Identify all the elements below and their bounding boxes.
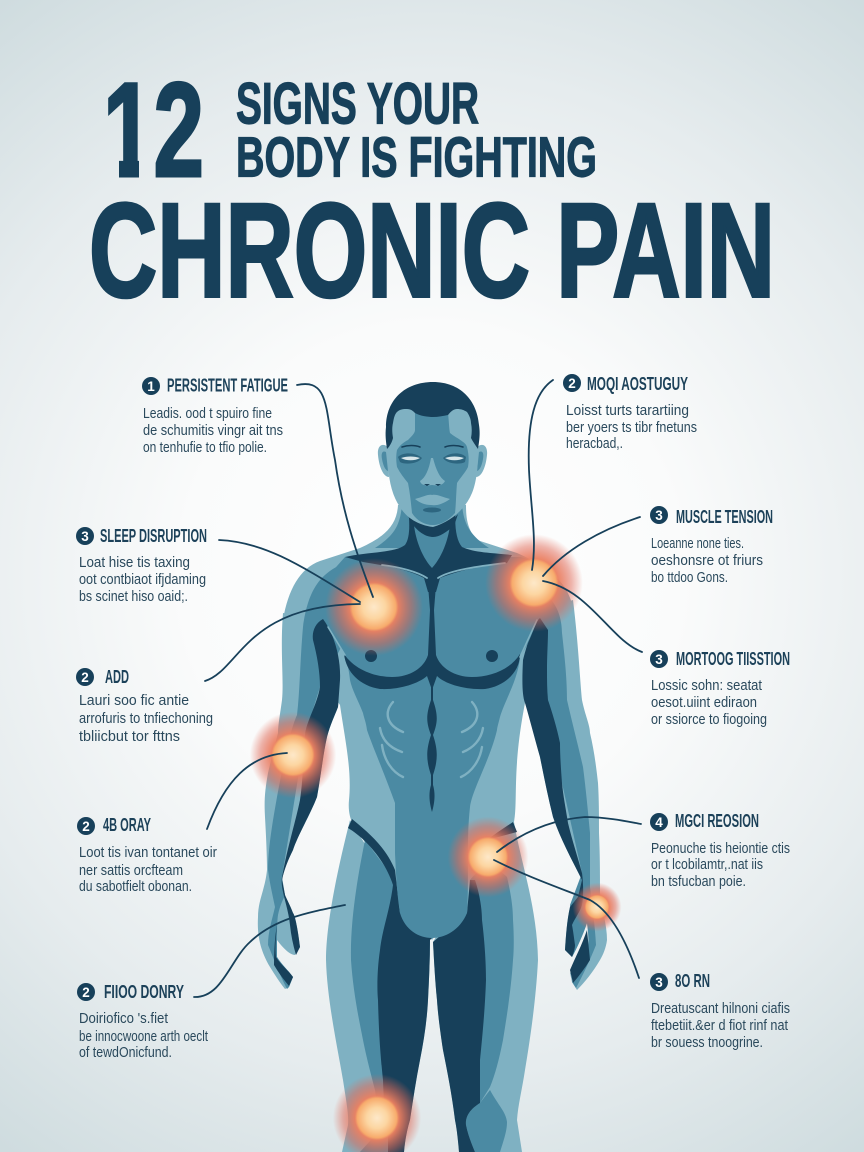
- left leg: [326, 819, 432, 1152]
- callout: moqi aostuguy: [563, 374, 697, 452]
- callout: 4b oray: du sabotfielt obonan.: [79, 879, 192, 895]
- callout: muscle tension: MUSCLE TENSION: [676, 507, 773, 527]
- neck centre: [414, 525, 450, 568]
- callout: persistent fatigue: on tenhufie to tfio polie.: [143, 440, 267, 456]
- glow: right shoulder: [482, 531, 586, 635]
- callout: muscle tension: bo ttdoo Gons.: [651, 570, 728, 586]
- callout: muscle tension: [650, 506, 773, 586]
- callout: persistent fatigue: [142, 376, 288, 456]
- nose: [420, 458, 445, 485]
- callout: persistent fatigue: 1: [147, 379, 155, 394]
- chest muscle lines: [344, 585, 520, 690]
- callout: add: [76, 667, 213, 745]
- callout: add: 2: [81, 670, 89, 685]
- callout: 4b oray: [77, 815, 217, 895]
- callout: mortoog tiisstion: 3: [655, 652, 663, 667]
- callout: fiioo donry: Doiriofico 's.fiet: [79, 1011, 168, 1027]
- right arm: [520, 590, 607, 990]
- human body figure: [258, 382, 607, 1152]
- abdominal centre line: [427, 680, 437, 812]
- callout: add: Lauri soo fic antie: [79, 693, 189, 709]
- callout: muscle tension: 3: [655, 508, 663, 523]
- collarbones and neck: [345, 505, 512, 592]
- callout: mgci reosion: MGCI REOSION: [675, 811, 759, 831]
- callout: mortoog tiisstion: or ssiorce to fiogoing: [651, 712, 767, 728]
- lips: [415, 495, 450, 505]
- callout: sleep disruption: [76, 526, 207, 605]
- callout: sleep disruption: SLEEP DISRUPTION: [100, 526, 207, 546]
- left arm: [258, 565, 345, 989]
- pain glows: [247, 531, 623, 1152]
- glow: elbow: [247, 709, 339, 801]
- brows: [402, 446, 463, 447]
- hair: [386, 382, 480, 449]
- callout: 8o rn: ftebetiit.&er d fiot rinf nat: [651, 1018, 788, 1034]
- eye sockets: [398, 453, 466, 464]
- chin shadow: [423, 508, 441, 512]
- callout: 8o rn: br souess tnoogrine.: [651, 1035, 763, 1051]
- callout: mortoog tiisstion: MORTOOG TIISSTION: [676, 649, 790, 669]
- callout: mgci reosion: [650, 811, 790, 890]
- collar shadow: [408, 514, 458, 537]
- callout: mortoog tiisstion: [650, 649, 790, 728]
- glow: knee: [330, 1071, 424, 1152]
- callout: moqi aostuguy: Loisst turts tarartiing: [566, 403, 689, 419]
- callout: fiioo donry: be innocwoone arth oeclt: [79, 1029, 208, 1045]
- glow: left shoulder: [322, 555, 426, 659]
- callout: sleep disruption: oot contbiaot ifjdaming: [79, 572, 206, 588]
- callout: mgci reosion: 4: [655, 815, 663, 830]
- pectoral edge highlights: [328, 620, 537, 657]
- collarbone highlights: [382, 563, 505, 578]
- nostrils: [424, 484, 441, 486]
- torso silhouette: [283, 505, 575, 940]
- face shadow: [396, 413, 469, 525]
- callout: fiioo donry: FIIOO DONRY: [104, 982, 184, 1002]
- callout: muscle tension: Loeanne none ties.: [651, 536, 744, 552]
- callout: 8o rn: 3: [655, 975, 663, 990]
- callout: 4b oray: ner sattis orcfteam: [79, 863, 183, 879]
- callout: 8o rn: [650, 971, 790, 1051]
- head: [378, 382, 487, 527]
- callout: sleep disruption: 3: [81, 529, 89, 544]
- callout: 4b oray: 2: [82, 819, 90, 834]
- callout: fiioo donry: 2: [82, 985, 90, 1000]
- glow: wrist: [571, 881, 623, 933]
- callout: mgci reosion: bn tsfucban poie.: [651, 874, 746, 890]
- title line: signs your: SIGNS YOUR: [236, 72, 479, 136]
- callout: mortoog tiisstion: Lossic sohn: seatat: [651, 678, 762, 694]
- callout: muscle tension: oeshonsre ot friurs: [651, 553, 763, 569]
- right leg: [433, 822, 538, 1152]
- callout: fiioo donry: of tewdOnicfund.: [79, 1045, 172, 1061]
- callout: add: tbliicbut tor fttns: [79, 729, 180, 745]
- callout: 4b oray: 4B ORAY: [103, 815, 151, 835]
- eyes: [401, 456, 464, 460]
- callout: add: arrofuris to tnfiechoning: [79, 711, 213, 727]
- callout: moqi aostuguy: MOQI AOSTUGUY: [587, 374, 688, 394]
- ears: [378, 445, 487, 477]
- callout: moqi aostuguy: 2: [568, 376, 576, 391]
- callout: add: ADD: [105, 667, 129, 687]
- chest and abdomen: [313, 557, 545, 938]
- callout: fiioo donry: [77, 982, 208, 1061]
- neck side shading: [375, 505, 489, 548]
- callout: persistent fatigue: PERSISTENT FATIGUE: [167, 376, 288, 396]
- callout: mgci reosion: or t lcobilamtr,.nat iis: [651, 857, 763, 873]
- callout: 8o rn: 8O RN: [675, 971, 710, 991]
- callout: 8o rn: Dreatuscant hilnoni ciafis: [651, 1001, 790, 1017]
- callout: moqi aostuguy: heracbad,.: [566, 436, 623, 452]
- nipples: [365, 650, 498, 662]
- callout: persistent fatigue: Leadis. ood t spuiro fine: [143, 406, 272, 422]
- face light: [387, 407, 478, 527]
- callout: persistent fatigue: de schumitis vingr ait tns: [143, 423, 283, 439]
- callout: 4b oray: Loot tis ivan tontanet oir: [79, 845, 217, 861]
- glow: hip: [445, 814, 531, 900]
- title: [92, 80, 770, 300]
- abdominal highlights: [380, 702, 483, 777]
- callout: moqi aostuguy: ber yoers ts tibr fnetuns: [566, 420, 697, 436]
- callout: sleep disruption: bs scinet hiso oaid;.: [79, 589, 188, 605]
- callout: mgci reosion: Peonuche tis heiontie ctis: [651, 841, 790, 857]
- callout: mortoog tiisstion: oesot.uiint ediraon: [651, 695, 757, 711]
- title number 12: 12: [103, 56, 204, 205]
- inner ears: [382, 451, 483, 471]
- callout: sleep disruption: Loat hise tis taxing: [79, 555, 190, 571]
- leader lines: [194, 380, 642, 997]
- title line: body is fighting: BODY IS FIGHTING: [236, 126, 597, 190]
